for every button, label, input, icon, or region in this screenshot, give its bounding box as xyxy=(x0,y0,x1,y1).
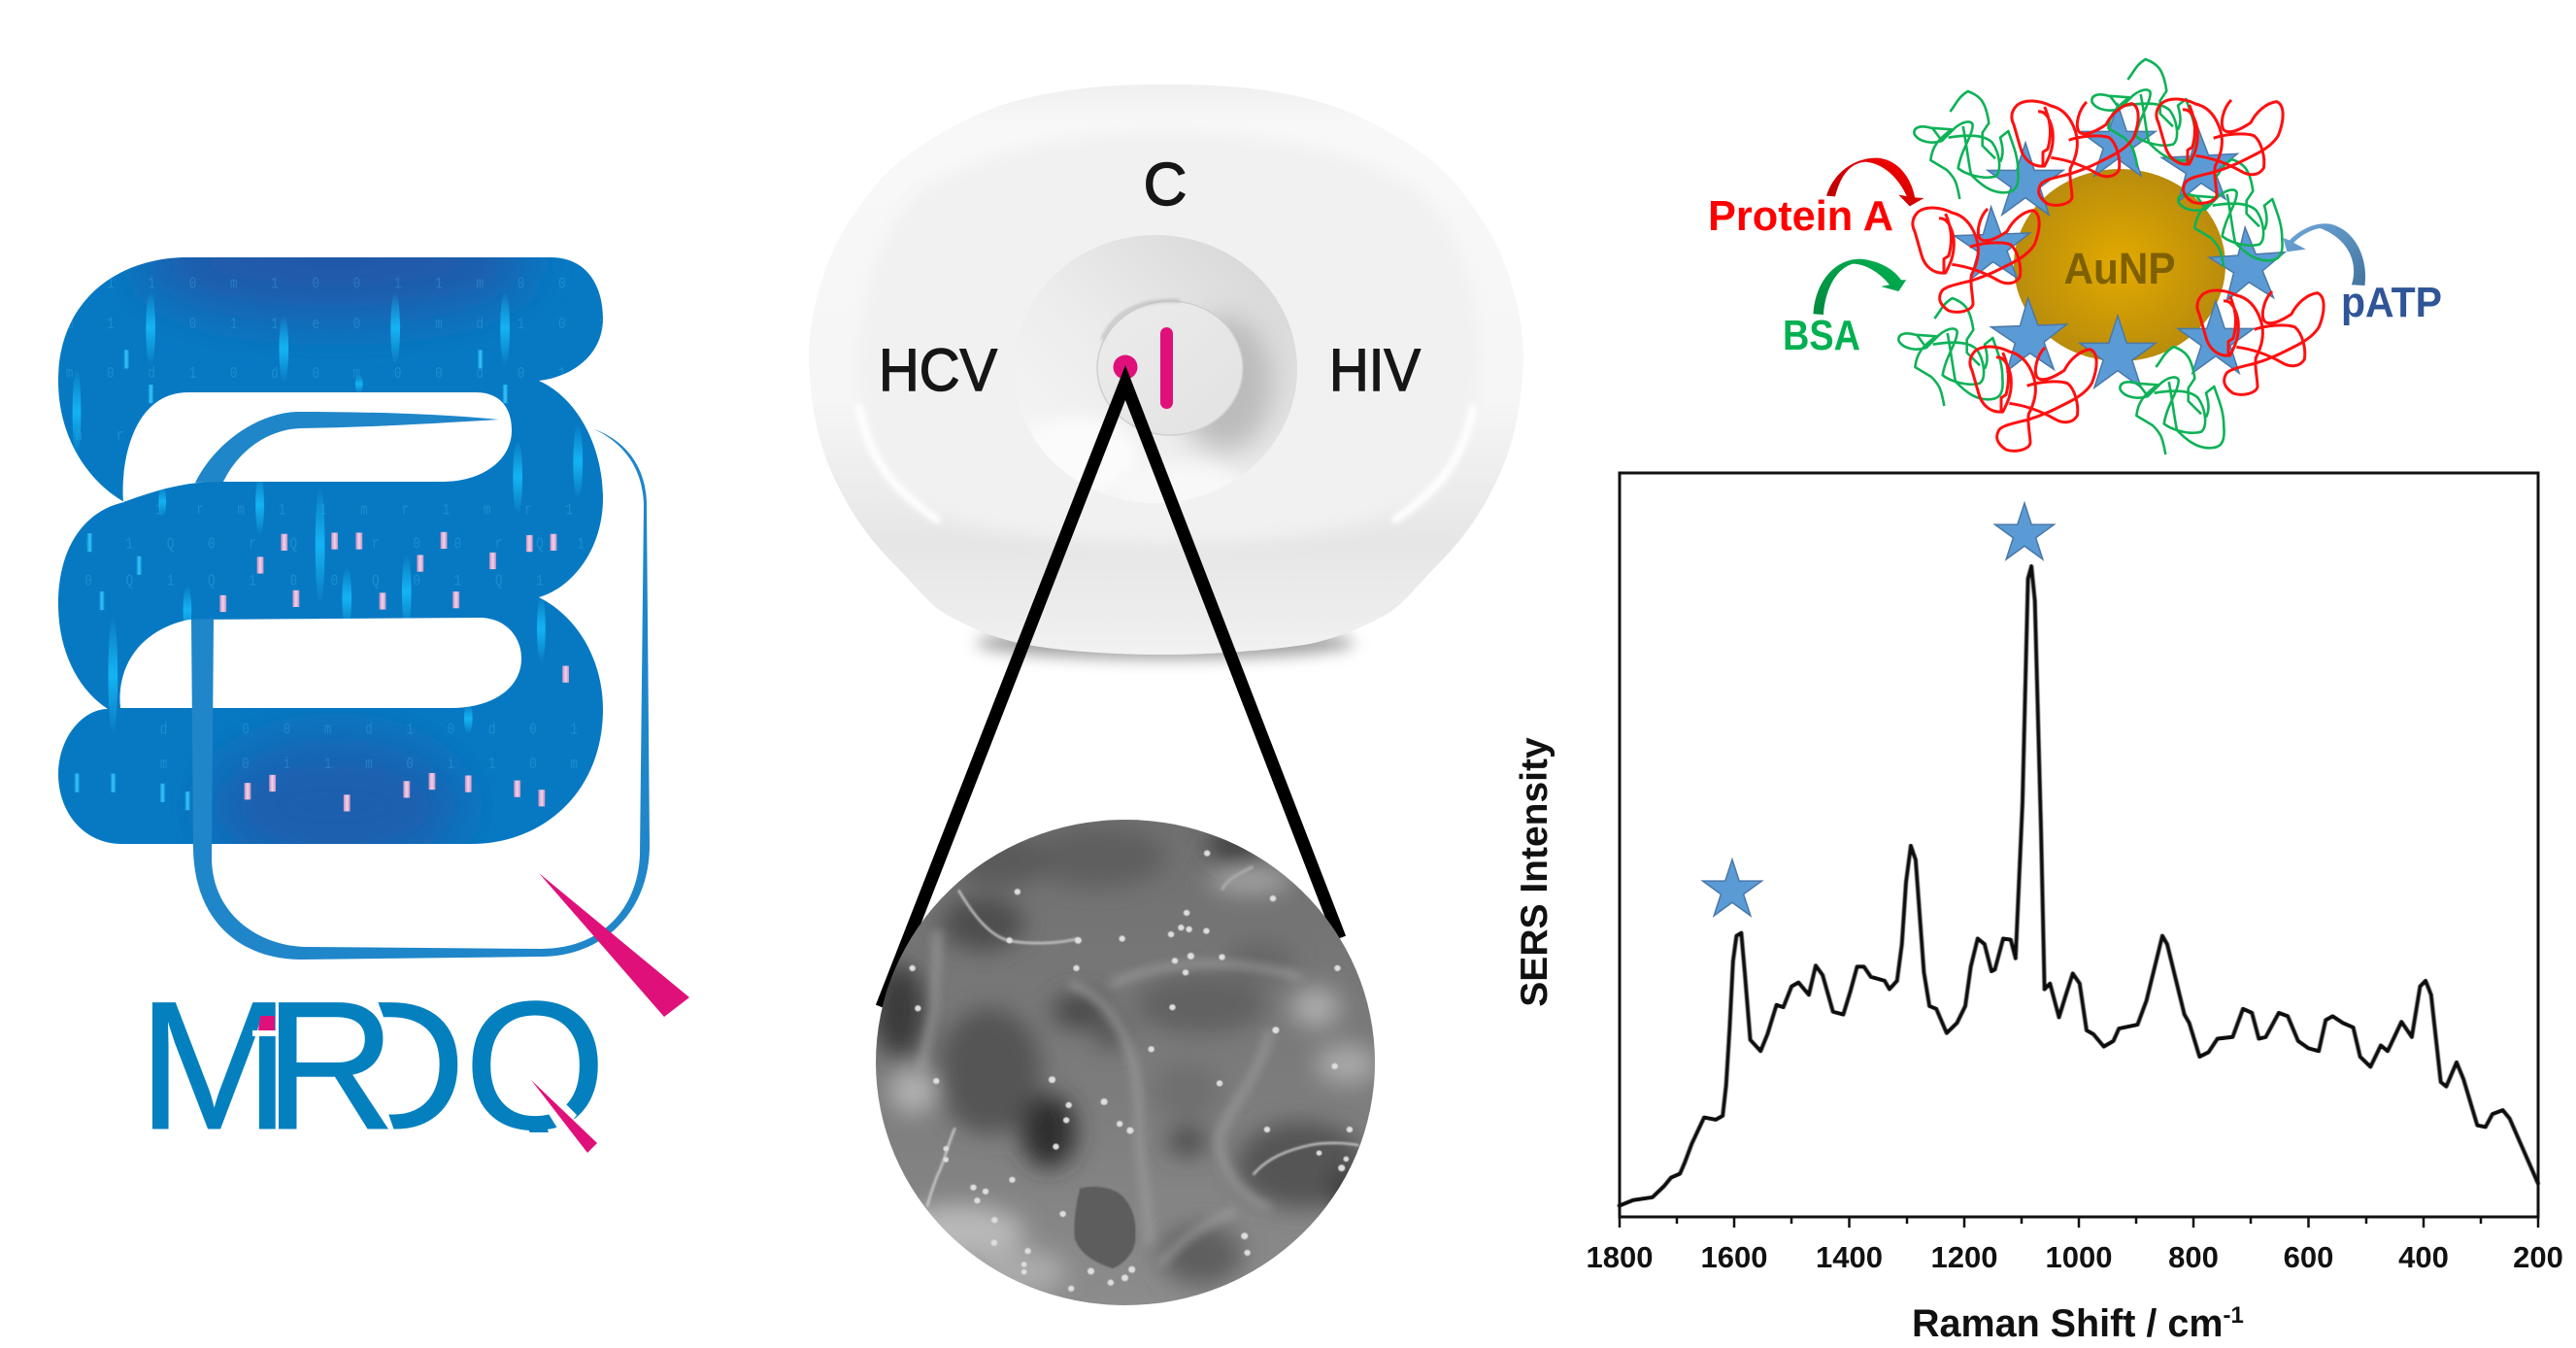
x axis tick labels: 1800 xyxy=(1587,1240,1653,1274)
logo data-pattern block: d 1 0 0 m d 1 0 d 0 1 m d 1 0 1 xyxy=(160,722,796,739)
nanoparticle dots xyxy=(909,851,1353,1292)
label Protein A: Protein A xyxy=(1708,192,1893,240)
test spot xyxy=(1113,355,1138,379)
arrow: BSA xyxy=(1813,259,1906,315)
logo data-pattern block xyxy=(58,257,603,844)
y axis title: SERS Intensity xyxy=(1514,737,1556,1007)
membrane ridges xyxy=(920,930,1302,1265)
x axis title: Raman Shift / cm xyxy=(1912,1302,2223,1345)
x axis tick labels: 1200 xyxy=(1931,1240,1997,1274)
label pATP: pATP xyxy=(2341,279,2442,326)
panel: MiRDQ logo xyxy=(58,257,689,1153)
logo data-pattern block: m 0 d 1 0 d 0 m 0 0 d 0 1 d 0 m d 0 1 xyxy=(66,366,825,384)
logo wordmark MiRDQ: M xyxy=(138,963,290,1167)
x axis tick labels: 400 xyxy=(2398,1240,2449,1274)
reporter stars xyxy=(1954,104,2288,388)
x axis tick labels: 1600 xyxy=(1701,1240,1767,1274)
control line xyxy=(1160,327,1173,409)
logo wordmark MiRDQ: D xyxy=(334,963,466,1167)
label BSA: BSA xyxy=(1783,312,1860,359)
x axis tick labels xyxy=(1587,1240,2563,1274)
dark cell regions xyxy=(874,826,1368,1285)
logo wordmark MiRDQ: R xyxy=(264,963,396,1167)
bright fibres xyxy=(927,866,1359,1206)
arrow: magnification wedge xyxy=(882,383,1340,1007)
device body xyxy=(796,78,1534,660)
panel: test device xyxy=(796,78,1534,660)
logo data-pattern block: 1 r m 1 1 m r 1 m r 1 m 1 1 0 1 r 1 m xyxy=(155,502,915,520)
logo data-pattern block: 0 Q 1 Q 1 0 0 Q 0 1 Q 1 0 0 1 Q 1 0 xyxy=(84,573,803,590)
chart: SERS spectrum xyxy=(1514,473,2563,1345)
x axis tick labels: 200 xyxy=(2513,1240,2563,1274)
x axis ticks xyxy=(1620,1217,2538,1228)
logo data-pattern block: r 1 Q 0 r Q 1 r 0 0 r Q 1 0 r Q 1 Q xyxy=(84,536,803,554)
label HIV: HIV xyxy=(1329,337,1421,403)
callout arrows xyxy=(1813,158,2365,315)
logo data-pattern block: 0 1 1 0 m 1 0 0 1 1 m 0 0 d 1 0 1 1 0 xyxy=(66,276,825,293)
arrow: pATP xyxy=(2283,223,2365,286)
spectrum line xyxy=(1620,566,2538,1206)
green BSA chains xyxy=(1898,59,2283,455)
bright membrane regions xyxy=(889,866,1378,1296)
logo data-pattern block: m 1 0 i 1 m 0 i 1 0 m 1 i 0 1 0 xyxy=(160,756,796,773)
red protein A chains xyxy=(1913,99,2324,451)
panel: AuNP SERS nanotag diagram xyxy=(1708,59,2442,455)
logo wordmark MiRDQ: Q xyxy=(464,963,606,1167)
icon: star marker at 1590 peak xyxy=(1703,859,1761,916)
logo data-pattern block: a r 0 a xyxy=(76,427,218,445)
panel: micrograph circle xyxy=(869,811,1384,1316)
x axis tick labels: 800 xyxy=(2168,1240,2219,1274)
device shadow xyxy=(976,627,1355,658)
arrow: protein A xyxy=(1826,158,1924,206)
icon: star marker at 1080 peak xyxy=(1995,503,2054,559)
logo wordmark MiRDQ xyxy=(151,1000,598,1153)
device sample well xyxy=(1033,235,1297,488)
x axis tick labels: 1000 xyxy=(2046,1240,2112,1274)
plot frame xyxy=(1620,473,2538,1217)
gold nanoparticle xyxy=(2014,169,2225,361)
label HCV: HCV xyxy=(879,337,997,403)
x axis tick labels: 1400 xyxy=(1816,1240,1883,1274)
x axis title: -1 xyxy=(2223,1302,2244,1329)
label AuNP: AuNP xyxy=(2064,244,2175,293)
logo data-pattern block: m 1 d 0 1 1 e 0 1 m d 1 0 1 1 0 m 1 0 xyxy=(66,317,825,334)
label C: C xyxy=(1144,152,1187,219)
logo magenta Q tail xyxy=(539,873,689,1017)
x axis tick labels: 600 xyxy=(2284,1240,2333,1274)
hole in membrane xyxy=(1074,1187,1136,1268)
logo ribbon Q-outline xyxy=(191,412,650,960)
